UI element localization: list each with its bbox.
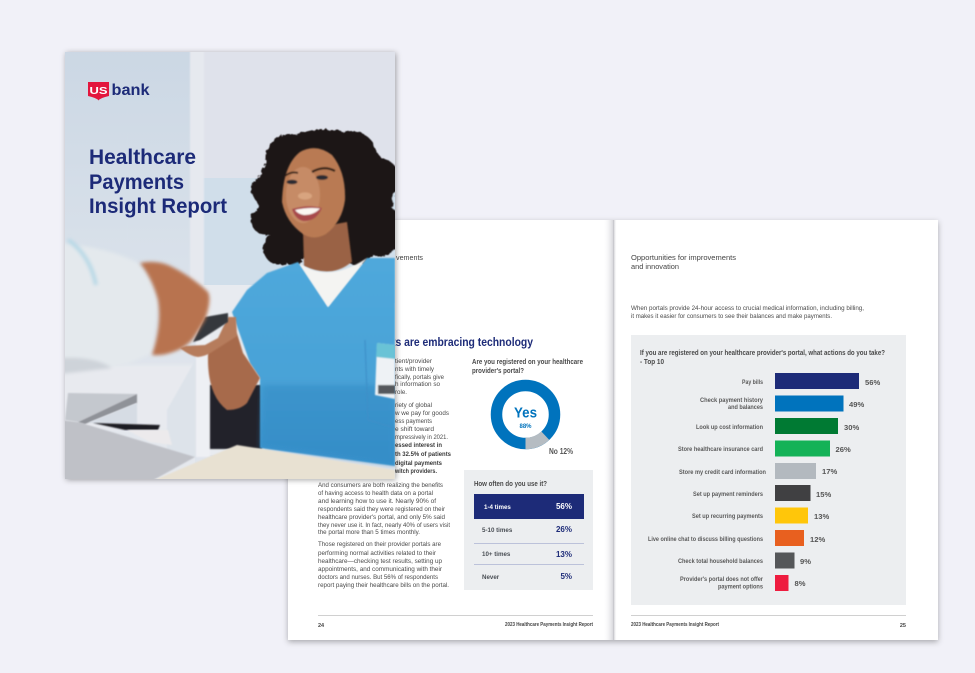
panel: open report spread (288, 220, 938, 640)
panel: usage frequency table: 1-4 times (484, 504, 511, 511)
body paragraph: registered users: report paying their healthcare bills on the portal. (318, 582, 449, 589)
bar: check payment history: Check payment history (700, 397, 764, 404)
body text visible fragments (394, 358, 451, 475)
panel: usage frequency table: Never (482, 574, 500, 581)
scrub pocket (365, 340, 395, 428)
body paragraph: consumers: the portal more than 5 times monthly. (318, 529, 420, 536)
US Bank logo: US (90, 85, 108, 97)
body text visible fragments: essed interest in (395, 442, 442, 449)
body text visible fragments: w we pay for goods (394, 410, 450, 417)
ID badge (375, 343, 395, 399)
body paragraph: registered users: doctors and nurses. But 56% of respondents (318, 574, 439, 581)
cover title (89, 146, 227, 218)
panel: usage frequency table: 10+ times (482, 551, 511, 558)
panel: usage frequency table: 56% (556, 502, 572, 511)
section label right page (631, 253, 736, 271)
body paragraph: consumers: and learning how to use it. Nearly 90% of (318, 498, 436, 505)
bar: recurring payments: 13% (814, 512, 829, 521)
panel: bar chart (631, 335, 906, 605)
bar: online chat (648, 530, 825, 546)
reception desk (60, 393, 395, 482)
donut chart: No 12% (549, 447, 573, 456)
cover title: Payments (89, 171, 184, 194)
bar: payment reminders: Set up payment reminders (693, 491, 763, 498)
right page footer (631, 615, 906, 629)
bar: household balances: 9% (800, 557, 811, 566)
body paragraph: consumers: of having access to health data on a portal (318, 490, 433, 497)
bar: payment reminders (693, 485, 831, 501)
chart heading: If you are registered on your healthcare provider's portal, what actions do you take? (640, 350, 885, 357)
nurse scrubs (232, 258, 395, 466)
panel: left page (318, 253, 593, 629)
body text visible fragments: mpressively in 2021. (395, 434, 448, 441)
body text visible fragments: ess payments (395, 418, 433, 425)
bar: payment reminders: 15% (816, 490, 831, 499)
nurse arm and hand (180, 317, 260, 410)
doctor white coat (60, 240, 158, 374)
bar: online chat: Live online chat to discuss billing questions (648, 536, 763, 543)
cover title: Healthcare (89, 146, 196, 169)
body text visible fragments: role. (395, 389, 407, 396)
body text visible fragments: fically, portals give (395, 374, 444, 381)
section label right page: Opportunities for improvements (631, 253, 736, 262)
donut question: Are you registered on your healthcare (472, 359, 583, 366)
bar: insurance card: Store healthcare insurance card (678, 446, 763, 453)
bar: no payment options: Provider's portal does not offer (680, 576, 764, 583)
bar: pay bills (742, 373, 880, 389)
left page heading: ts are embracing technology (392, 335, 533, 349)
nurse face (282, 148, 345, 238)
donut chart: 88% (520, 423, 532, 430)
intro text: When portals provide 24-hour access to crucial medical information, including billing, (631, 305, 864, 312)
body paragraph: consumers: healthcare provider's portal, and only 5% said (318, 514, 445, 521)
body text visible fragments: th 32.5% of patients (395, 451, 451, 458)
body paragraph: registered users: appointments, and communicating with their (318, 566, 443, 573)
scrub shading (260, 385, 395, 466)
bar: household balances: Check total household balances (678, 558, 763, 565)
nurse hair back (251, 129, 404, 266)
intro text (631, 305, 864, 320)
bar: online chat: 12% (810, 535, 825, 544)
bar: credit card: 17% (822, 467, 837, 476)
left page footer: 24 (318, 623, 325, 629)
left page footer (318, 615, 593, 629)
bar: insurance card: 26% (836, 445, 851, 454)
bar: look up cost (696, 418, 859, 434)
bar: pay bills: Pay bills (742, 379, 763, 386)
body paragraph: registered users: healthcare—checking test results, setting up (318, 558, 442, 565)
doctor hand (140, 262, 209, 355)
bar: check payment history: and balances (728, 404, 763, 411)
body paragraph: consumers (318, 482, 450, 536)
donut chart (496, 386, 573, 456)
intro text: it makes it easier for consumers to see their balances and make payments. (631, 313, 832, 320)
body text visible fragments: riety of global (395, 402, 432, 409)
bar: no payment options: 8% (794, 579, 806, 588)
white undershirt (299, 258, 367, 307)
panel: usage frequency table: 5-10 times (482, 527, 513, 534)
body text visible fragments: h information so (395, 381, 440, 388)
cover title: Insight Report (89, 195, 227, 218)
chart heading (640, 350, 885, 366)
bar: recurring payments: Set up recurring payments (692, 513, 763, 520)
phone (193, 313, 228, 342)
panel: usage frequency table: 13% (556, 550, 572, 559)
panel: report cover (60, 45, 404, 485)
body text visible fragments: tient/provider (395, 358, 433, 365)
body text visible fragments: e shift toward (395, 426, 434, 433)
bar: credit card (679, 463, 837, 479)
body paragraph: consumers: respondents said they were registered on their (318, 506, 446, 513)
body text visible fragments: nts with timely (395, 366, 435, 373)
US Bank logo: bank (112, 82, 150, 99)
body paragraph: registered users (318, 541, 449, 589)
body paragraph: registered users: Those registered on their provider portals are (318, 541, 441, 548)
panel: usage frequency table: How often do you use it? (474, 481, 547, 488)
panel: usage frequency table: 26% (556, 525, 572, 534)
nurse neck (303, 222, 352, 272)
donut question: provider's portal? (472, 368, 524, 375)
body text visible fragments: digital payments (395, 460, 442, 467)
panel: usage frequency table (464, 470, 593, 590)
bar: no payment options: payment options (718, 584, 763, 590)
US Bank logo (88, 82, 150, 100)
body paragraph: registered users: performing normal activities related to their (318, 550, 437, 557)
bar: no payment options (680, 575, 806, 591)
section label right page: and innovation (631, 262, 679, 271)
bar: look up cost: 30% (844, 423, 859, 432)
panel: right page (631, 253, 906, 629)
body paragraph: consumers: they never use it. In fact, nearly 40% of users visit (318, 522, 450, 529)
bar: insurance card (678, 440, 851, 456)
dark shadow under arm (210, 385, 262, 449)
body paragraph: consumers: And consumers are both realizing the benefits (318, 482, 444, 489)
bar: pay bills: 56% (865, 378, 880, 387)
right page footer: 25 (900, 623, 906, 629)
donut question (472, 359, 583, 375)
bar: credit card: Store my credit card information (679, 469, 766, 476)
bar: check payment history: 49% (849, 400, 864, 409)
body text visible fragments: witch providers. (394, 468, 437, 475)
section label left page: vements (396, 253, 423, 262)
chart heading: - Top 10 (640, 359, 664, 366)
right page footer: 2023 Healthcare Payments Insight Report (631, 622, 719, 628)
panel: usage frequency table: 5% (560, 572, 572, 581)
bar: household balances (678, 552, 811, 568)
bar: check payment history (700, 396, 864, 412)
donut chart: Yes (514, 404, 537, 422)
bar: recurring payments (692, 508, 829, 524)
bar: look up cost: Look up cost information (696, 424, 763, 431)
cover photo (60, 45, 404, 485)
left page footer: 2023 Healthcare Payments Insight Report (505, 622, 593, 628)
